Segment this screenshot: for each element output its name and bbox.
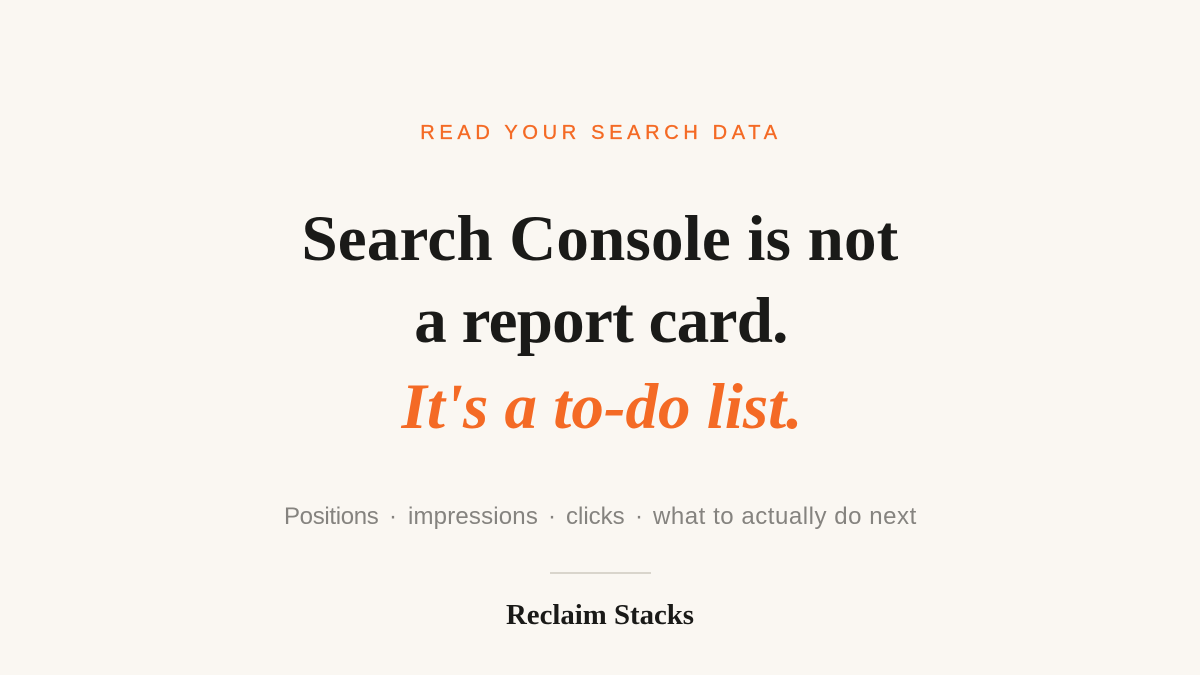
subtitle topics: impressions [408,503,538,530]
title highlight line: It's a to-do list. [402,371,802,443]
subtitle topics: what to actually do next [653,503,917,530]
subtitle topics: Positions [284,503,378,530]
eyebrow heading: READ YOUR SEARCH DATA [420,122,782,144]
subtitle topics: clicks [566,503,625,530]
subtitle topics: · [635,503,643,530]
title line 1: Search Console is not [301,203,899,275]
subtitle topics: · [548,503,556,530]
brand name: Reclaim Stacks [506,599,694,631]
subtitle topics [284,503,917,530]
subtitle topics: · [389,503,397,530]
title line 2: a report card. [414,285,788,357]
